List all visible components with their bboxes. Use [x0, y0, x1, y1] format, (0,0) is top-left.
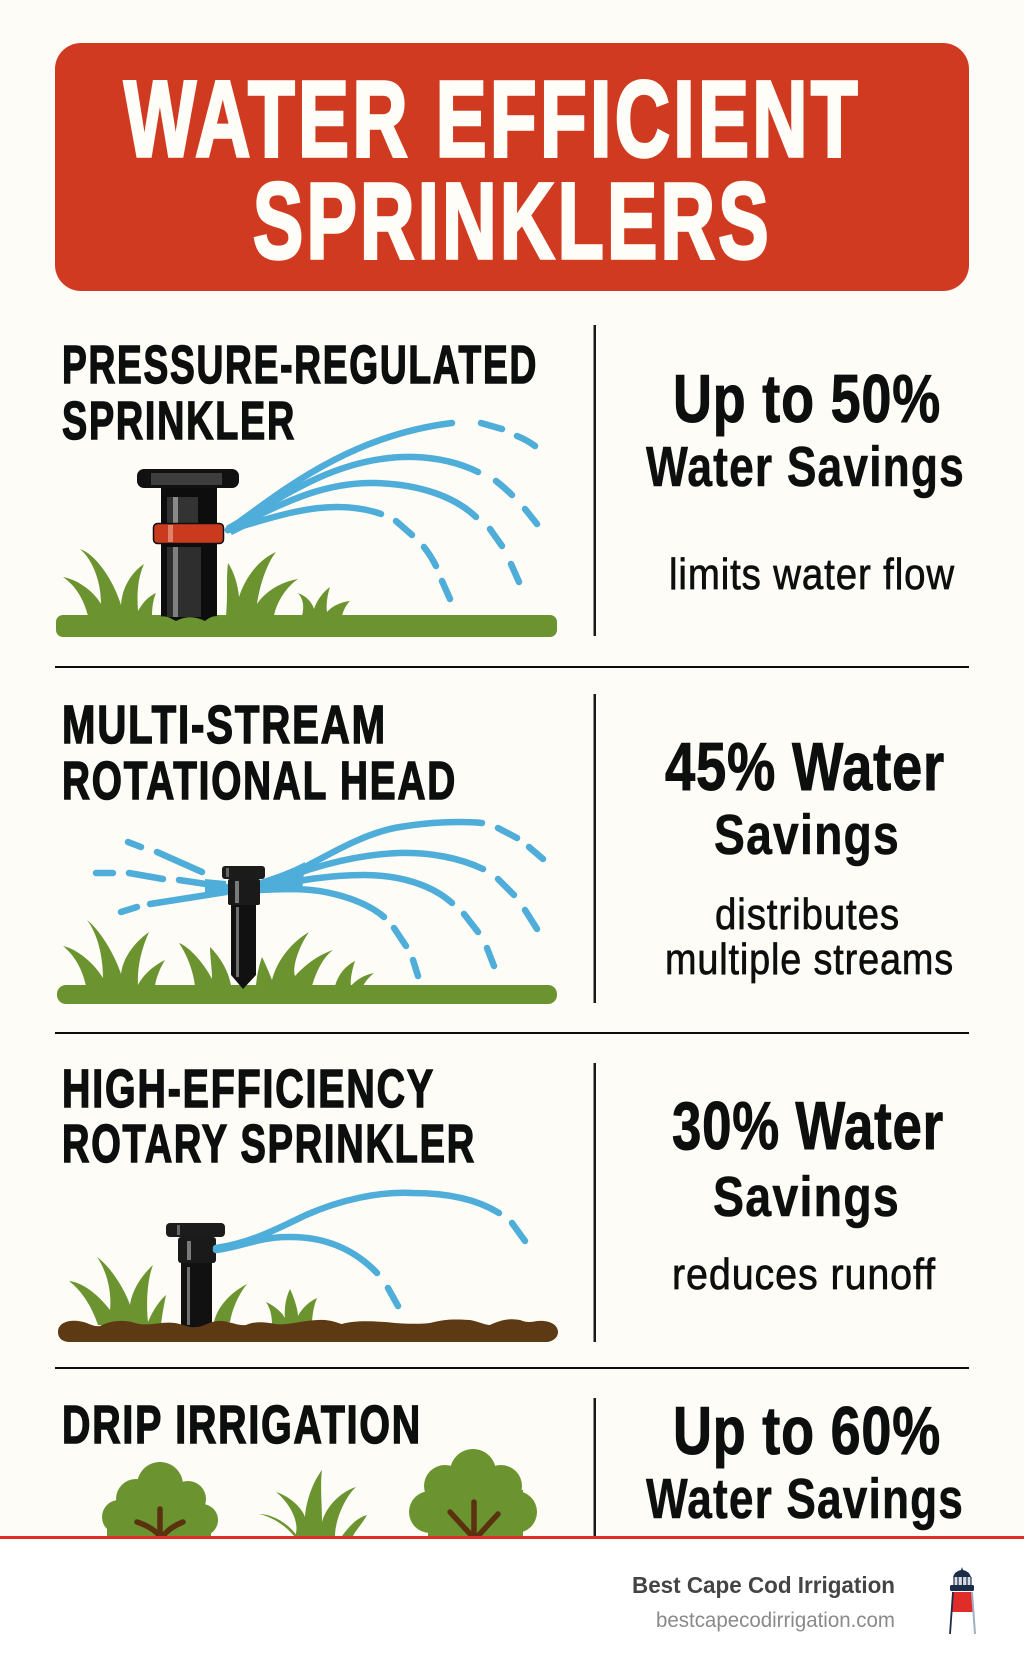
panel: pressure-regulated sprinkler [56, 325, 965, 637]
heading: pressure-regulated sprinkler: SPRINKLER [62, 391, 296, 451]
footer: brand [632, 1572, 895, 1632]
stat: 30% water savings: reduces runoff [672, 1250, 936, 1299]
icon: lighthouse [950, 1567, 975, 1634]
stat: up to 50% water savings: limits water flow [669, 550, 955, 599]
heading: high-efficiency rotary sprinkler: HIGH-EFFICIENCY [62, 1059, 435, 1119]
divider [594, 694, 596, 1003]
stat: up to 50% water savings: Up to 50% [673, 361, 941, 437]
panel: drip irrigation [62, 1393, 964, 1536]
panel: multi-stream rotational head [57, 694, 954, 1004]
divider [594, 325, 596, 636]
stat: 30% water savings [672, 1088, 944, 1299]
illustration: pressure-regulated sprinkler on grass [56, 423, 557, 637]
illustration: multi-stream head on grass [57, 822, 557, 1004]
title banner: SPRINKLERS [253, 160, 772, 281]
stat: 45% water savings: Savings [714, 803, 900, 867]
footer: brand: Best Cape Cod Irrigation [632, 1572, 895, 1598]
panel: high-efficiency rotary sprinkler [58, 1059, 944, 1342]
footer: brand: bestcapecodirrigation.com [656, 1609, 895, 1632]
stat: 45% water savings: 45% Water [665, 729, 945, 805]
heading: pressure-regulated sprinkler [62, 335, 538, 451]
stat: 30% water savings: Savings [713, 1165, 900, 1229]
stat: up to 60% water savings [646, 1393, 964, 1531]
title banner [55, 43, 969, 291]
stat: up to 50% water savings [646, 361, 965, 599]
heading: multi-stream rotational head [62, 695, 457, 811]
heading: multi-stream rotational head: MULTI-STREAM [62, 695, 387, 755]
stat: 45% water savings [665, 729, 954, 984]
divider [594, 1063, 596, 1342]
illustration: shrubs and grass [102, 1449, 537, 1536]
heading: multi-stream rotational head: ROTATIONAL HEAD [62, 751, 457, 811]
heading: high-efficiency rotary sprinkler [62, 1059, 476, 1174]
stat: up to 60% water savings: Up to 60% [673, 1393, 941, 1469]
stat: 45% water savings: multiple streams [665, 935, 954, 984]
illustration: rotary sprinkler in soil [58, 1193, 558, 1342]
stat: 45% water savings: distributes [715, 890, 900, 939]
heading: high-efficiency rotary sprinkler: ROTARY SPRINKLER [62, 1114, 476, 1174]
divider [594, 1398, 596, 1536]
footer rule [0, 1536, 1024, 1539]
stat: 30% water savings: 30% Water [672, 1088, 944, 1164]
heading: pressure-regulated sprinkler: PRESSURE-REGULATED [62, 335, 538, 395]
heading: drip irrigation: DRIP IRRIGATION [62, 1395, 422, 1455]
